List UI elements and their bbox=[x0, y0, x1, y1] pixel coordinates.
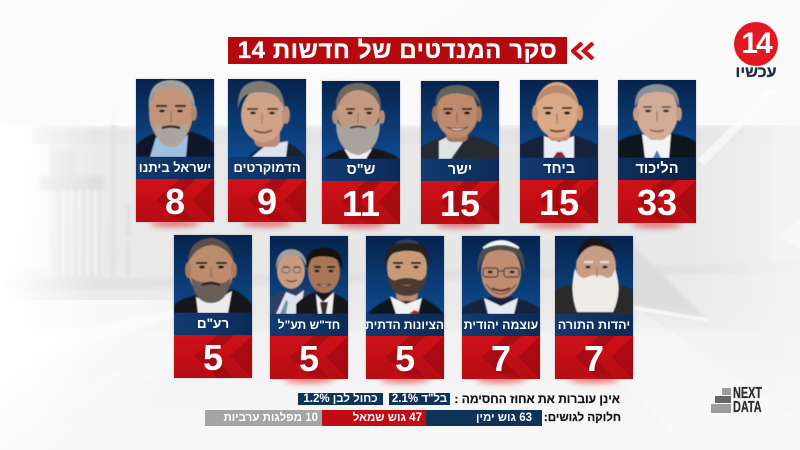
seats: 5 bbox=[395, 338, 415, 378]
glow bbox=[284, 377, 334, 383]
glow bbox=[435, 222, 485, 228]
panel: Hadash Ta'al 5 bbox=[270, 236, 348, 378]
party name bbox=[462, 314, 540, 336]
party name bbox=[270, 314, 348, 336]
tag: Balad: בל"ד 2.1% bbox=[392, 393, 447, 405]
icon: double chevron bbox=[571, 42, 594, 60]
glow bbox=[534, 222, 584, 228]
chevron panel bbox=[366, 336, 444, 379]
logo caption: עכשיו bbox=[736, 64, 776, 81]
party name bbox=[174, 313, 252, 335]
seats: 7 bbox=[491, 338, 511, 378]
portrait bbox=[228, 79, 306, 157]
title bbox=[228, 37, 594, 64]
glow bbox=[380, 377, 430, 383]
party name: חד"ש תע"ל bbox=[278, 318, 340, 332]
party name: ישראל ביתנו bbox=[139, 160, 211, 175]
chevron panel bbox=[322, 181, 400, 224]
glow bbox=[242, 221, 292, 227]
portrait bbox=[618, 80, 696, 158]
party name bbox=[366, 314, 444, 336]
bar: right bloc: 63 גוש ימין bbox=[476, 412, 532, 424]
seats: 7 bbox=[584, 338, 604, 378]
bar: Arab parties bbox=[205, 410, 322, 426]
seats: 11 bbox=[342, 183, 380, 224]
portrait bbox=[366, 236, 444, 314]
portrait bbox=[520, 80, 598, 158]
portrait bbox=[322, 81, 400, 159]
panel: Likud 33 bbox=[618, 80, 696, 223]
party name bbox=[322, 159, 400, 181]
title bar: סקר המנדטים של חדשות 14 bbox=[238, 37, 557, 64]
logo bars bbox=[711, 388, 731, 413]
chevron panel bbox=[421, 181, 499, 224]
party name: רע"ם bbox=[197, 316, 229, 331]
threshold row bbox=[298, 392, 620, 406]
logo circle: 14 bbox=[741, 27, 771, 60]
panel: Religious Zionism 5 bbox=[366, 236, 444, 378]
chevron panel bbox=[228, 179, 306, 222]
party name bbox=[555, 314, 633, 336]
party name: ש"ס bbox=[347, 162, 375, 178]
portrait bbox=[555, 236, 633, 314]
seats: 15 bbox=[440, 182, 480, 224]
panel: Shas 11 bbox=[322, 81, 400, 224]
seats: 8 bbox=[165, 181, 185, 222]
chevron panel bbox=[174, 335, 252, 378]
party name: ביחד bbox=[543, 160, 575, 176]
party name: הדמוקרטים bbox=[233, 160, 301, 175]
chevron panel bbox=[520, 180, 598, 223]
portrait bbox=[174, 235, 252, 313]
seats: 5 bbox=[203, 337, 223, 378]
bar: Arab parties: 10 מפלגות ערביות bbox=[223, 412, 318, 424]
party name bbox=[228, 157, 306, 179]
portrait bbox=[421, 81, 499, 159]
party name bbox=[618, 158, 696, 180]
logo: Next Data bbox=[711, 385, 762, 416]
panel: Ra'am 5 bbox=[174, 235, 252, 378]
bar: left bloc: 47 גוש שמאל bbox=[353, 412, 422, 424]
party name: הציונות הדתית bbox=[365, 318, 444, 332]
glow bbox=[150, 221, 200, 227]
panel: United Torah Judaism 7 bbox=[555, 236, 633, 378]
glow bbox=[569, 377, 619, 383]
party name: עוצמה יהודית bbox=[464, 318, 538, 332]
tag: Blue and White: כחול לבן 1.2% bbox=[303, 393, 378, 405]
chevron panel bbox=[618, 180, 696, 223]
threshold label: אינן עוברות את אחוז החסימה : bbox=[454, 392, 620, 406]
bar: left bloc bbox=[322, 410, 426, 426]
panel: Democrats 9 bbox=[228, 79, 306, 222]
panel: Otzma Yehudit 7 bbox=[462, 236, 540, 378]
seats: 9 bbox=[257, 181, 277, 222]
party name: ישר bbox=[448, 162, 472, 178]
panel: Yisrael Beiteinu 8 bbox=[136, 79, 214, 222]
glow bbox=[632, 222, 682, 228]
party name: הליכוד bbox=[635, 161, 678, 177]
bloc breakdown row bbox=[205, 410, 621, 426]
chevron panel bbox=[555, 336, 633, 379]
seats: 5 bbox=[299, 338, 319, 378]
glow bbox=[476, 377, 526, 383]
chevron panel bbox=[462, 336, 540, 379]
seats: 15 bbox=[539, 182, 579, 222]
bloc label: חלוקה לגושים: bbox=[544, 411, 621, 424]
logo: channel 14 now bbox=[734, 22, 778, 81]
portrait bbox=[270, 236, 348, 314]
portrait bbox=[462, 236, 540, 314]
party name bbox=[520, 158, 598, 180]
party name: יהדות התורה bbox=[558, 318, 630, 332]
portrait bbox=[136, 79, 214, 157]
seats: 33 bbox=[637, 182, 677, 223]
panel: Yashar 15 bbox=[421, 80, 499, 224]
logo wordmark: NEXT bbox=[733, 385, 762, 402]
glow bbox=[336, 222, 386, 228]
bar: right bloc bbox=[426, 410, 542, 426]
chevron panel bbox=[136, 179, 214, 222]
logo circle bbox=[734, 22, 778, 66]
logo wordmark bbox=[733, 385, 762, 416]
logo wordmark: DATA bbox=[733, 398, 762, 416]
party name bbox=[421, 158, 499, 180]
chevron panel bbox=[270, 336, 348, 379]
panel: Bennett 15 bbox=[520, 80, 598, 222]
party name bbox=[136, 157, 214, 179]
